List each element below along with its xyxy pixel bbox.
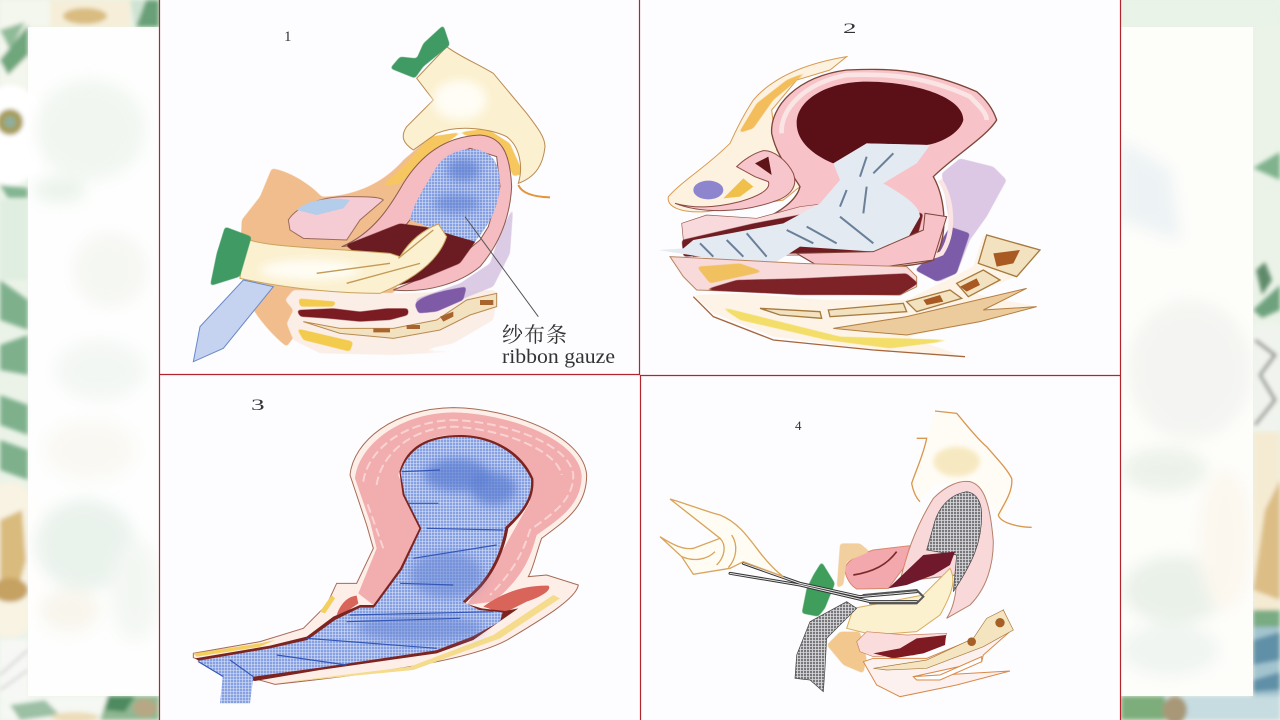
panel grid lines, red bbox=[159, 0, 1121, 720]
purple pool bbox=[915, 227, 970, 282]
red lumen, left bbox=[337, 596, 358, 615]
hand shading bbox=[933, 447, 980, 477]
bladder bbox=[675, 151, 795, 211]
grey gauze strip bbox=[795, 602, 857, 692]
orange body upper bbox=[837, 543, 870, 588]
blood clot bbox=[345, 223, 477, 287]
blue gauze bbox=[197, 437, 531, 703]
lower body bbox=[863, 610, 1012, 697]
panel 2: uterus with clot and gauze bbox=[658, 57, 1040, 357]
bladder lumen bbox=[853, 552, 897, 575]
labia and vaginal wall bbox=[682, 203, 873, 257]
vertebra, upper bbox=[995, 618, 1005, 627]
examining hand bbox=[847, 568, 953, 635]
purple shadow bbox=[415, 207, 513, 313]
callout: ribbon gauze label: 纱布条 bbox=[502, 319, 568, 349]
maroon lower cavity bbox=[682, 200, 923, 257]
vertebrae bbox=[303, 293, 497, 338]
maroon cavity lining bbox=[195, 435, 534, 681]
fat layer bbox=[382, 128, 523, 187]
rectum wall bbox=[670, 257, 917, 295]
purple pool bbox=[415, 287, 467, 313]
packed white gauze bbox=[658, 143, 930, 262]
upper hand highlight bbox=[433, 80, 487, 120]
abdominal wall bbox=[668, 57, 847, 212]
lower hand highlight bbox=[260, 260, 360, 280]
fat layer bbox=[738, 65, 823, 133]
vertebra, lower bbox=[967, 637, 976, 646]
fat and spine bbox=[297, 298, 353, 352]
panel 3: uterus fully packed with blue gauze bbox=[193, 408, 587, 703]
wall stripe lines bbox=[363, 420, 573, 595]
rectum wall bbox=[857, 632, 947, 657]
yellow fat, upper wall bbox=[193, 595, 335, 657]
marrow bbox=[923, 250, 1020, 305]
bladder bbox=[845, 546, 910, 589]
lower hand bbox=[240, 224, 447, 293]
rectum lumen bbox=[703, 273, 918, 295]
gauze dark patch bbox=[447, 158, 480, 182]
bladder fat bbox=[723, 178, 753, 198]
bladder lumen bbox=[755, 157, 772, 175]
gauze lower patch bbox=[433, 193, 480, 213]
green cuff bbox=[802, 562, 835, 617]
blood bbox=[888, 552, 955, 588]
wrist strap bbox=[518, 185, 550, 197]
upper hand bbox=[403, 47, 545, 183]
rectum lumen bbox=[873, 635, 946, 658]
callout: ribbon gauze label bbox=[502, 319, 615, 368]
lower body bbox=[693, 235, 1040, 357]
gauze creases bbox=[700, 153, 893, 257]
bladder lumen bbox=[297, 199, 350, 215]
panel number 3: 3 bbox=[251, 396, 265, 414]
translucent white overlay: left bbox=[28, 27, 159, 696]
grey gauze bbox=[927, 492, 982, 592]
leader line bbox=[465, 217, 538, 317]
ribbon gauze packing bbox=[410, 149, 500, 242]
coccyx tissue bbox=[833, 288, 1037, 335]
gauze fold lines bbox=[198, 470, 503, 677]
uterus wall bbox=[342, 135, 512, 291]
gauze dark patch, neck bbox=[410, 552, 483, 598]
red lumen, right bbox=[483, 586, 549, 613]
forceps bbox=[730, 563, 923, 603]
uterus wall bbox=[900, 481, 993, 618]
panel 4: removing gauze with forceps bbox=[660, 411, 1032, 697]
urine and vessel bbox=[693, 181, 723, 199]
translucent white overlay: right bbox=[1121, 27, 1253, 696]
panel number 2: 2 bbox=[843, 20, 857, 36]
skin line bbox=[693, 297, 965, 357]
operator finger lines bbox=[682, 535, 736, 568]
white picture area bbox=[159, 0, 1121, 720]
finger lines bbox=[317, 230, 433, 283]
rectal fat bbox=[697, 263, 763, 283]
gauze dark patch, top bbox=[423, 458, 490, 492]
bladder bbox=[288, 197, 383, 240]
marrow bbox=[373, 300, 493, 332]
upper cuff, green bbox=[390, 25, 450, 78]
lower cuff, green bbox=[210, 227, 252, 286]
patient body, orange outline bbox=[240, 140, 427, 347]
muscular wall bbox=[355, 412, 582, 605]
sacrum bbox=[760, 235, 1040, 318]
panel 1: packing with ribbon gauze bbox=[193, 25, 550, 362]
purple shadow bbox=[915, 158, 1007, 282]
lower body bbox=[285, 290, 498, 355]
ribbon gauze tail bbox=[193, 280, 273, 362]
uterus body fill bbox=[193, 408, 587, 684]
gauze dark patch, middle bbox=[470, 472, 517, 505]
dark clot bbox=[797, 82, 963, 163]
upper hand outline bbox=[912, 411, 1032, 527]
yellow fat, lower wall bbox=[275, 595, 560, 683]
coccyx channel bbox=[913, 657, 982, 680]
upper hand fill bbox=[912, 411, 1012, 522]
yellow fat bbox=[720, 307, 957, 348]
panel number 1: 1 bbox=[284, 29, 292, 45]
cervix lip bbox=[797, 213, 947, 268]
callout: ribbon gauze label: ribbon gauze bbox=[502, 346, 615, 368]
bowel, maroon bbox=[297, 308, 408, 322]
panel number 4: 4 bbox=[795, 418, 802, 433]
gauze dark patch, lower bbox=[357, 615, 483, 642]
orange body lower bbox=[827, 632, 867, 673]
spine bbox=[873, 610, 1013, 670]
operator hand bbox=[660, 499, 783, 577]
wall pale band bbox=[782, 75, 987, 263]
uterus wall bbox=[757, 69, 997, 267]
